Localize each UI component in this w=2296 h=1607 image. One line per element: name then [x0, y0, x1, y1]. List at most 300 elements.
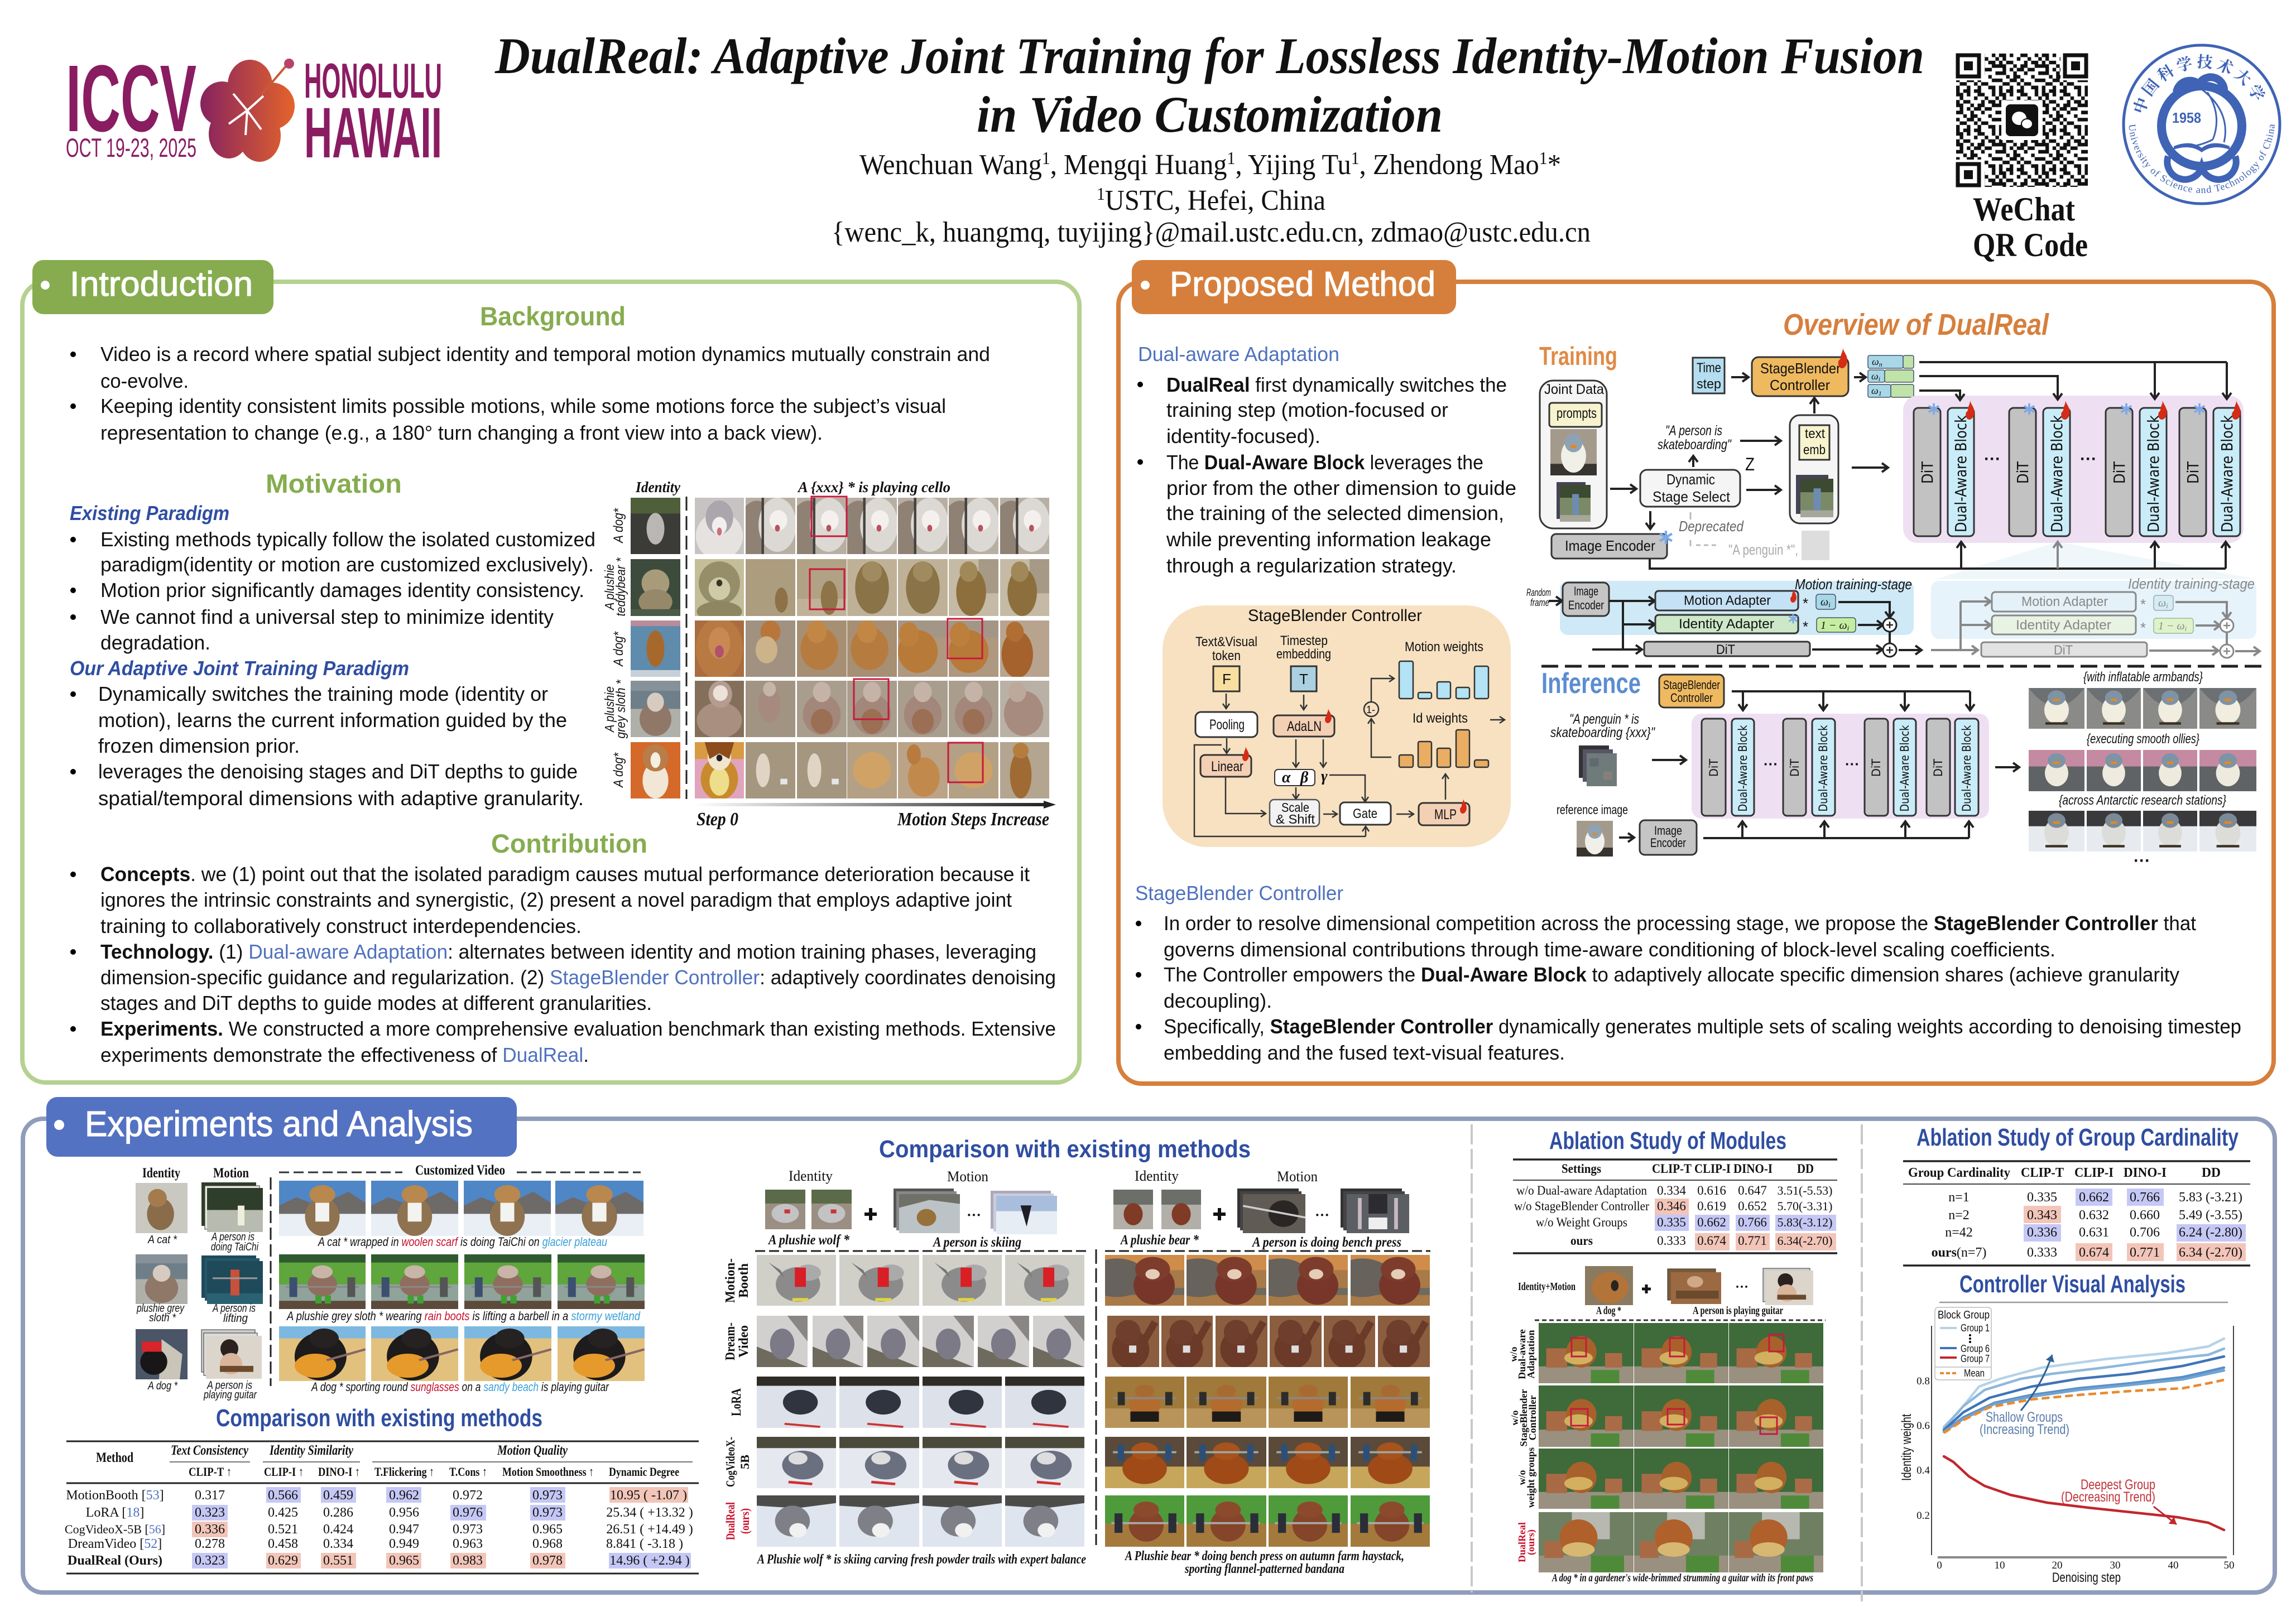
table: comparison with existing methods: 0.424 [323, 1522, 353, 1537]
table: comparison with existing methods: DualReal (Ours) [68, 1553, 162, 1568]
figure: motion steps image grid: A dog* [611, 631, 626, 667]
text block: dual-aware bullets: The Dual-Aware Block leverages the [1166, 451, 1483, 474]
figure: ablation guitar examples [1508, 1266, 1826, 1584]
line chart: identity weight over denoising step: 0.2 [1916, 1510, 1930, 1522]
table: ablation of modules: w/o Weight Groups [1536, 1215, 1627, 1229]
table: comparison with existing methods: 0.978 [532, 1553, 563, 1568]
text block: contribution bullets [70, 863, 1056, 1066]
text block: adaptive paradigm bullets: frozen dimension prior. [98, 734, 300, 757]
table: comparison with existing methods: 8.841 ( -3.18 ) [606, 1537, 683, 1551]
table: ablation of group cardinality: 0.706 [2130, 1225, 2160, 1240]
figure: customized video examples: Identity [142, 1166, 180, 1181]
introduction header: Introduction [70, 265, 253, 304]
table: comparison with existing methods: 0.334 [323, 1537, 353, 1551]
diagram: stageblender controller: Id weights [1413, 711, 1468, 726]
heading: contribution: Contribution [491, 829, 647, 858]
diagram: motion training stage: Motion Adapter [1684, 593, 1771, 608]
connectors: omega routing [1650, 362, 2227, 569]
text block: stageblender bullets: decoupling). [1164, 989, 1272, 1012]
diagram: identity training stage: 1 − ω [2158, 620, 2185, 632]
figure: customized video examples: A plushie grey sloth * wearing rain boots is lifting a barbell in a stormy wetland [286, 1309, 641, 1323]
comparison row labels: CogVideoX- [723, 1437, 737, 1487]
dit block stack: DiT [2184, 461, 2202, 484]
table: ablation of group cardinality: Group Cardinality [1908, 1166, 2010, 1180]
introduction header [32, 260, 273, 314]
reference penguin image [1577, 821, 1613, 857]
text block: adaptive paradigm bullets: Dynamically switches the training mode (identity or [98, 682, 548, 705]
table: ablation of modules [1513, 1159, 1837, 1253]
diagram: stageblender controller: β [1300, 769, 1309, 786]
inference DiT stack: ··· [1845, 756, 1860, 772]
table: ablation of group cardinality: 0.343 [2027, 1208, 2057, 1223]
table: comparison with existing methods [65, 1441, 699, 1574]
diagram: stageblender controller: Motion weights [1405, 639, 1483, 655]
line chart: identity weight over denoising step: 0.6 [1916, 1420, 1930, 1432]
figure: customized video examples: doing TaiChi [211, 1241, 258, 1253]
line chart: identity weight over denoising step: 10 [1995, 1560, 2005, 1571]
diagram: stageblender controller [1163, 605, 1511, 847]
table: ablation of group cardinality: 6.34 (-2.70) [2179, 1245, 2242, 1260]
dynamic stage select: Stage Select [1653, 488, 1731, 505]
title: in Video Customization [977, 86, 1443, 143]
diagram: identity training stage: * [2140, 619, 2146, 636]
table: ablation of group cardinality: 0.632 [2079, 1208, 2109, 1223]
panel: introduction [22, 260, 1079, 1082]
logo: USTC seal: 1958 [2172, 109, 2201, 126]
diagram: stageblender controller: embedding [1276, 647, 1331, 662]
WeChat QR label: QR Code [1973, 227, 2088, 263]
dit block stack: DiT [2014, 461, 2032, 484]
figure: motion steps image grid: A plushie [602, 564, 617, 611]
figure: ablation guitar examples: Adaptation [1525, 1330, 1536, 1379]
logo: USTC seal: 中国科学技术大学 [2133, 54, 2265, 113]
line chart: identity weight over denoising step: 0.4 [1916, 1465, 1930, 1476]
line chart: identity weight over denoising step: (Decreasing Trend) [2061, 1489, 2155, 1505]
table: ablation of modules: 0.647 [1738, 1183, 1767, 1197]
figure: comparison inputs: A plushie wolf * [767, 1233, 849, 1248]
table: comparison with existing methods: 0.949 [389, 1537, 419, 1551]
line chart: identity weight over denoising step: 50 [2223, 1560, 2235, 1571]
table: ablation of group cardinality: 0.335 [2027, 1190, 2057, 1205]
figure: customized video examples: A person is [212, 1302, 256, 1315]
comparison captions: A Plushie wolf * is skiing carving fresh powder trails with expert balance [756, 1552, 1086, 1567]
table: comparison with existing methods: 0.323 [195, 1553, 225, 1568]
logo: ICCV 2025 Honolulu Hawaii [66, 46, 442, 173]
table: comparison with existing methods: DreamVideo [52] [68, 1537, 162, 1551]
text block: existing paradigm bullets: Existing methods typically follow the isolated customized [100, 528, 595, 551]
omega weights: ω [1871, 371, 1879, 382]
table: comparison with existing methods: 0.336 [195, 1522, 225, 1537]
figure: ablation guitar examples: weight groups [1525, 1447, 1536, 1508]
diagram: stageblender controller: Text&Visual [1195, 634, 1257, 649]
figure: ablation guitar examples: Dual-aware [1516, 1329, 1528, 1379]
comparison row labels: (ours) [738, 1508, 752, 1534]
figure: motion steps image grid: teddybear * [613, 557, 628, 616]
diagram: motion training stage: i [1828, 600, 1831, 609]
table: comparison with existing methods: 25.34 ( +13.32 ) [606, 1505, 693, 1520]
omega weights [1868, 355, 1914, 397]
comparison row labels: Dream- [723, 1322, 738, 1360]
table: comparison with existing methods: CLIP-I ↑ [264, 1465, 304, 1479]
figure: motion steps image grid: Step 0 [697, 809, 738, 830]
inference image encoder [1640, 820, 1697, 855]
figure: ablation guitar examples: w/o [1508, 1347, 1519, 1361]
inference DiT stack: DiT [1707, 759, 1721, 777]
panel: experiments and analysis [23, 1097, 2275, 1601]
diagram: stageblender controller: Timestep [1280, 633, 1328, 648]
text block: background bullets: co-evolve. [100, 369, 189, 392]
figure: motion steps image grid: Motion Steps Increase [897, 809, 1049, 830]
deprecated branch: "A penguin *", [1728, 541, 1798, 558]
table: ablation of group cardinality: 0.336 [2027, 1225, 2057, 1240]
table: ablation of modules: 0.346 [1657, 1199, 1686, 1213]
table: ablation of modules: 6.34(-2.70) [1778, 1234, 1832, 1248]
table: comparison with existing methods: Dynamic Degree [609, 1465, 679, 1479]
table: comparison with existing methods: 0.973 [453, 1522, 483, 1537]
figure: comparison inputs: ··· [1315, 1207, 1329, 1223]
diagram: stageblender controller: γ [1321, 768, 1328, 785]
table: comparison with existing methods: 0.972 [453, 1488, 483, 1503]
table: comparison with existing methods: 0.973 [532, 1488, 563, 1503]
line chart: identity weight over denoising step: 0 [1937, 1560, 1942, 1571]
comparison row labels: DualReal [723, 1502, 737, 1540]
text block: background bullets [70, 343, 990, 444]
table: ablation of modules: 5.70(-3.31) [1778, 1199, 1832, 1213]
diagram: identity training stage: ω [2158, 597, 2166, 609]
dynamic stage select [1640, 470, 1740, 507]
inference DiT stack: DiT [1870, 759, 1883, 777]
diagram: motion training stage: Motion training-stage [1795, 576, 1912, 593]
table: ablation of modules: ours [1570, 1234, 1593, 1248]
comparison captions: sporting flannel-patterned bandana [1184, 1562, 1344, 1576]
image encoder [1552, 531, 1672, 559]
table: ablation of group cardinality: DINO-I [2124, 1166, 2167, 1180]
figure: ablation guitar examples: w/o [1509, 1411, 1520, 1425]
chart legend: Mean [1964, 1368, 1985, 1379]
authors: 1 [1539, 148, 1548, 168]
table: comparison with existing methods: 0.551 [323, 1553, 353, 1568]
text block: contribution bullets: training to collaboratively construct interdependencies. [100, 915, 582, 937]
table: comparison with existing methods: 0.965 [389, 1553, 419, 1568]
table: comparison with existing methods: Identity Similarity [269, 1443, 354, 1458]
diagram: stageblender controller: Pooling [1209, 717, 1245, 733]
heading: motivation: Motivation [266, 469, 402, 498]
figure: ablation guitar examples: A person is playing guitar [1693, 1305, 1783, 1317]
diagram: stageblender controller: Scale [1281, 800, 1309, 815]
comparison captions: A Plushie bear * doing bench press on autumn farm haystack, [1124, 1549, 1404, 1563]
diagram: stageblender controller: α [1282, 769, 1291, 786]
figure: customized video examples: lifting [223, 1312, 248, 1325]
figure: customized video examples: A person is [211, 1231, 254, 1243]
dit block stack: Dual-Aware Block [2218, 415, 2236, 532]
dit block stack: ··· [2080, 450, 2097, 468]
authors: , Yijing Tu [1235, 149, 1351, 181]
figure: ablation guitar examples: DualReal [1516, 1522, 1528, 1562]
diagram: training pipeline: Z [1745, 454, 1755, 474]
logo: ICCV 2025 Honolulu Hawaii: HAWAII [304, 93, 442, 173]
figure: customized video examples: Customized Video [415, 1163, 505, 1178]
table: comparison with existing methods: 0.962 [389, 1488, 419, 1503]
authors: * [1548, 149, 1561, 181]
figure: motion steps image grid [602, 479, 1056, 830]
title: DualReal: Adaptive Joint Training for Lossless Identity-Motion Fusion [494, 27, 1924, 84]
table: comparison with existing methods: 0.317 [195, 1488, 225, 1503]
figure: ablation guitar examples: Controller [1527, 1396, 1538, 1440]
title [494, 27, 1924, 143]
line chart: identity weight over denoising step: 30 [2110, 1560, 2121, 1571]
figure: comparison wolf results [757, 1255, 1084, 1547]
authors: USTC, Hefei, China [1105, 185, 1325, 216]
table: comparison with existing methods: 0.976 [453, 1505, 483, 1520]
figure: ablation guitar examples: A dog * in a gardener's wide-brimmed strumming a guitar with its front paws [1552, 1572, 1813, 1584]
timestep: Time [1697, 360, 1721, 376]
figure: motion steps image grid: grey sloth * [613, 680, 628, 739]
table: ablation of group cardinality: 0.674 [2079, 1245, 2109, 1260]
authors: , Zhendong Mao [1360, 149, 1539, 181]
table: comparison with existing methods: LoRA [18] [86, 1505, 144, 1520]
table: ablation of modules: CLIP-I [1694, 1162, 1731, 1176]
timestep [1693, 358, 1725, 393]
penguin result rows: ··· [2134, 851, 2150, 870]
text block: dual-aware bullets: identity-focused). [1166, 425, 1320, 448]
stageblender small block [1659, 675, 1724, 708]
diagram: motion training stage [1526, 576, 1922, 657]
heading: background: Background [480, 301, 626, 331]
figure: comparison inputs: Identity [1135, 1168, 1179, 1184]
diagram: motion training stage: DiT [1716, 642, 1735, 657]
heading: overview of DualReal: Overview of DualReal [1783, 308, 2049, 341]
prompt text: skateboarding" [1658, 437, 1732, 453]
authors: 1 [1227, 148, 1235, 168]
subheading: dual-aware adaptation: Dual-aware Adaptation [1138, 343, 1339, 365]
text block: stageblender bullets: The Controller empowers the Dual-Aware Block to adaptively allocate specific dimension shares (achieve granularity [1164, 963, 2179, 986]
figure: customized video examples: A dog * sporting round sunglasses on a sandy beach is playing guitar [310, 1380, 609, 1394]
stageblender controller block: Controller [1770, 377, 1830, 393]
inference prompt [1550, 711, 1655, 740]
text block: existing paradigm bullets: paradigm(identity or motion are customized exclusively). [100, 553, 594, 576]
text emb column: text [1805, 426, 1825, 441]
experiments header [46, 1097, 517, 1157]
text emb column [1790, 415, 1838, 523]
text block: contribution bullets: stages and DiT depths to guide modes at different granularities. [100, 992, 652, 1014]
figure: customized video examples: A person is [206, 1379, 252, 1392]
figure: ablation guitar examples: w/o [1516, 1470, 1528, 1485]
table: comparison with existing methods: 0.956 [389, 1505, 419, 1520]
subheading: existing paradigm: Existing Paradigm [70, 502, 229, 525]
diagram: stageblender controller: 1- [1366, 704, 1375, 715]
figure: comparison inputs: Identity [789, 1168, 833, 1184]
text: HONOLULU [304, 53, 442, 108]
inference image encoder: Encoder [1650, 836, 1686, 850]
figure: comparison inputs: Motion [947, 1168, 988, 1185]
figure: comparison inputs: ··· [967, 1207, 981, 1223]
figure: ablation guitar examples: (ours) [1525, 1529, 1537, 1555]
table: ablation of modules: 5.83(-3.12) [1778, 1215, 1832, 1229]
chart legend: Group 1 [1961, 1322, 1990, 1334]
table: comparison with existing methods: 0.629 [268, 1553, 298, 1568]
subheading: stageblender controller: StageBlender Controller [1135, 882, 1343, 904]
table: ablation of modules: 0.674 [1697, 1234, 1726, 1248]
inference DiT stack: ··· [1764, 756, 1778, 772]
table: comparison with existing methods: 0.566 [268, 1488, 298, 1503]
diagram: identity training stage: i [2185, 624, 2187, 633]
line chart: identity weight over denoising step: 0.8 [1916, 1375, 1930, 1387]
penguin result rows: {with inflatable armbands} [2083, 670, 2203, 685]
diagram: motion training stage: * [1803, 618, 1808, 635]
figure: customized video examples: Motion [213, 1166, 249, 1181]
prompt text: "A person is [1665, 423, 1722, 439]
text block: dual-aware bullets: DualReal first dynamically switches the [1166, 373, 1507, 396]
text block: contribution bullets: Technology. (1) Dual-aware Adaptation: alternates between identity and motion training phases, leveraging [100, 940, 1036, 963]
table: comparison with existing methods: 0.278 [195, 1537, 225, 1551]
figure: motion steps image grid: A {xxx} * is playing cello [797, 479, 950, 495]
text block: existing paradigm bullets: Motion prior significantly damages identity consistency. [100, 579, 584, 602]
line chart: identity weight over denoising step: 40 [2168, 1560, 2179, 1571]
table: comparison with existing methods: MotionBooth [53] [66, 1488, 164, 1503]
table: ablation of modules: CLIP-T [1652, 1162, 1692, 1176]
WeChat QR label [1973, 191, 2088, 263]
text block: dual-aware bullets: the training of the selected dimension, [1166, 502, 1504, 525]
omega weights: 1 [1879, 389, 1882, 397]
dit block stack: ··· [1984, 450, 2001, 468]
heading: controller visual analysis: Controller Visual Analysis [1959, 1271, 2185, 1298]
diagram: stageblender controller: & Shift [1276, 812, 1315, 826]
prompt text [1658, 423, 1732, 453]
figure: customized video examples: A cat * [147, 1234, 177, 1246]
text block: contribution bullets: ignores the intrinsic constraints and synergistic, (2) present a novel paradigm that employs adaptive joint [100, 888, 1012, 911]
figure: customized video examples: A dog * [147, 1380, 178, 1392]
figure: comparison inputs: A plushie bear * [1120, 1233, 1199, 1248]
table: ablation of group cardinality: CLIP-I [2074, 1166, 2114, 1180]
inference image encoder: Image [1654, 824, 1682, 838]
figure: customized video examples: A cat * wrapped in woolen scarf is doing TaiChi on glacier plateau [317, 1235, 607, 1249]
table: comparison with existing methods: DINO-I ↑ [318, 1465, 360, 1479]
inference DiT stack [1692, 714, 1989, 819]
table: ablation of modules: DINO-I [1733, 1162, 1773, 1176]
stageblender controller block [1752, 348, 1848, 396]
table: ablation of group cardinality: 0.766 [2130, 1190, 2160, 1205]
table: comparison with existing methods: 10.95 ( -1.07 ) [610, 1488, 687, 1503]
figure: customized video examples [136, 1163, 645, 1401]
inference prompt: skateboarding {xxx}" [1550, 725, 1655, 740]
table: ablation of group cardinality: ours(n=7) [1932, 1245, 1986, 1260]
table: ablation of modules: 0.333 [1657, 1234, 1686, 1248]
text block: stageblender bullets: Specifically, StageBlender Controller dynamically generates multiple sets of scaling weights according to denoising timestep [1164, 1015, 2241, 1038]
table: comparison with existing methods: 0.965 [532, 1522, 563, 1537]
figure: ablation guitar examples: StageBlender [1518, 1389, 1529, 1446]
joint data column [1540, 381, 1607, 528]
table: ablation of modules: 0.334 [1657, 1183, 1686, 1197]
inference DiT stack: Dual-Aware Block [1736, 725, 1750, 811]
diagram: motion training stage: Encoder [1568, 598, 1604, 612]
diagram: stageblender controller: MLP [1434, 807, 1457, 822]
text block: stageblender bullets: embedding and the fused text-visual features. [1164, 1041, 1565, 1064]
table: comparison with existing methods: 0.521 [268, 1522, 298, 1537]
proposed method header: Proposed Method [1170, 265, 1435, 304]
figure: comparison inputs [755, 1168, 1430, 1545]
diagram: motion training stage: Image [1574, 584, 1598, 598]
line chart: identity weight over denoising step: Denoising step [2052, 1570, 2121, 1585]
stageblender small block: StageBlender [1663, 678, 1720, 692]
proposed method header [1132, 260, 1456, 314]
table: comparison with existing methods: Motion Quality [497, 1443, 568, 1458]
authors: {wenc_k, huangmq, tuyijing}@mail.ustc.edu.cn, zdmao@ustc.edu.cn [832, 216, 1591, 248]
table: ablation of group cardinality: n=1 [1948, 1190, 1970, 1205]
diagram: motion training stage: Random [1526, 587, 1551, 598]
authors: 1 [1042, 148, 1050, 168]
table: comparison with existing methods: 0.425 [268, 1505, 298, 1520]
table: comparison with existing methods: CogVideoX-5B [56] [65, 1522, 165, 1536]
penguin result rows: {across Antarctic research stations} [2059, 793, 2226, 808]
omega weights: i [1879, 375, 1880, 383]
diagram: inference pipeline [1541, 667, 2256, 870]
table: ablation of group cardinality: 6.24 (-2.80) [2179, 1225, 2242, 1240]
diagram: stageblender controller: token [1212, 648, 1241, 663]
table: comparison with existing methods: CLIP-T ↑ [189, 1465, 232, 1479]
table: ablation of group cardinality: n=42 [1945, 1225, 1973, 1240]
dit block stack: Dual-Aware Block [1952, 415, 1970, 532]
text block: stageblender bullets: In order to resolve dimensional competition across the processing stage, we propose the StageBlender Controller that [1164, 912, 2196, 935]
diagram: stageblender controller: Gate [1353, 806, 1377, 821]
penguin result rows: {executing smooth ollies} [2087, 732, 2199, 747]
text block: dual-aware bullets [1137, 373, 1516, 577]
joint data column: Joint Data [1544, 382, 1604, 397]
comparison captions [756, 1549, 1404, 1576]
line chart: identity weight over denoising step: 20 [2052, 1560, 2063, 1571]
authors: Wenchuan Wang [859, 149, 1055, 181]
table: comparison with existing methods: Motion Smoothness ↑ [502, 1465, 594, 1479]
table: ablation of group cardinality: 0.631 [2079, 1225, 2109, 1240]
table: ablation of modules: 0.771 [1738, 1234, 1767, 1248]
chart legend: Group 7 [1961, 1353, 1990, 1364]
table: ablation of modules: 0.766 [1738, 1215, 1767, 1229]
table: comparison with existing methods: Method [96, 1450, 133, 1465]
text block: contribution bullets: Experiments. We constructed a more comprehensive evaluation benchmark than existing methods. Extensive [100, 1017, 1056, 1040]
omega weights: n [1879, 360, 1882, 368]
line chart: identity weight over denoising step: Deepest Group [2081, 1477, 2155, 1493]
text block: background bullets: representation to change (e.g., a 180° turn changing a front view into a back view). [100, 421, 823, 444]
figure: ablation guitar examples: ··· [1735, 1280, 1749, 1295]
text block: contribution bullets: dimension-specific guidance and regularization. (2) StageBlender Controller: adaptively coordinates denoising [100, 966, 1056, 989]
chart legend: Group 6 [1961, 1343, 1990, 1354]
omega weights: ω [1872, 356, 1879, 367]
reference image label: reference image [1557, 802, 1628, 817]
line chart: identity weight over denoising step: Shallow Groups [1986, 1409, 2063, 1425]
table: ablation of modules: w/o StageBlender Controller [1514, 1199, 1649, 1213]
diagram: motion training stage: 1 − ω [1821, 619, 1847, 632]
text block: adaptive paradigm bullets: motion), learns the current information guided by the [98, 709, 567, 732]
table: ablation of group cardinality: DD [2202, 1166, 2221, 1180]
deprecated branch [1679, 512, 1829, 560]
table: ablation of group cardinality: n=2 [1948, 1208, 1970, 1223]
table: comparison with existing methods: 0.323 [195, 1505, 225, 1520]
diagram: identity training stage: DiT [2054, 643, 2073, 658]
text block: dual-aware bullets: training step (motion-focused or [1166, 398, 1448, 421]
figure: ablation guitar examples: Identity+Motion [1518, 1281, 1576, 1293]
authors: 1 [1097, 184, 1105, 204]
inference DiT stack: Dual-Aware Block [1817, 725, 1830, 811]
figure: comparison inputs: A person is skiing [932, 1235, 1021, 1250]
table: comparison with existing methods: 0.973 [532, 1505, 563, 1520]
text block: dual-aware bullets: prior from the other dimension to guide [1166, 477, 1516, 499]
heading: comparison with existing methods (table): Comparison with existing methods [216, 1404, 542, 1432]
table: ablation of modules: DD [1797, 1162, 1814, 1176]
inference label: Inference [1541, 667, 1641, 700]
figure: motion steps image grid: A plushie [602, 686, 617, 733]
diagram: stageblender controller: T [1299, 671, 1308, 687]
figure: customized video examples: plushie grey [136, 1302, 185, 1315]
panel: proposed method [1118, 260, 2274, 1084]
